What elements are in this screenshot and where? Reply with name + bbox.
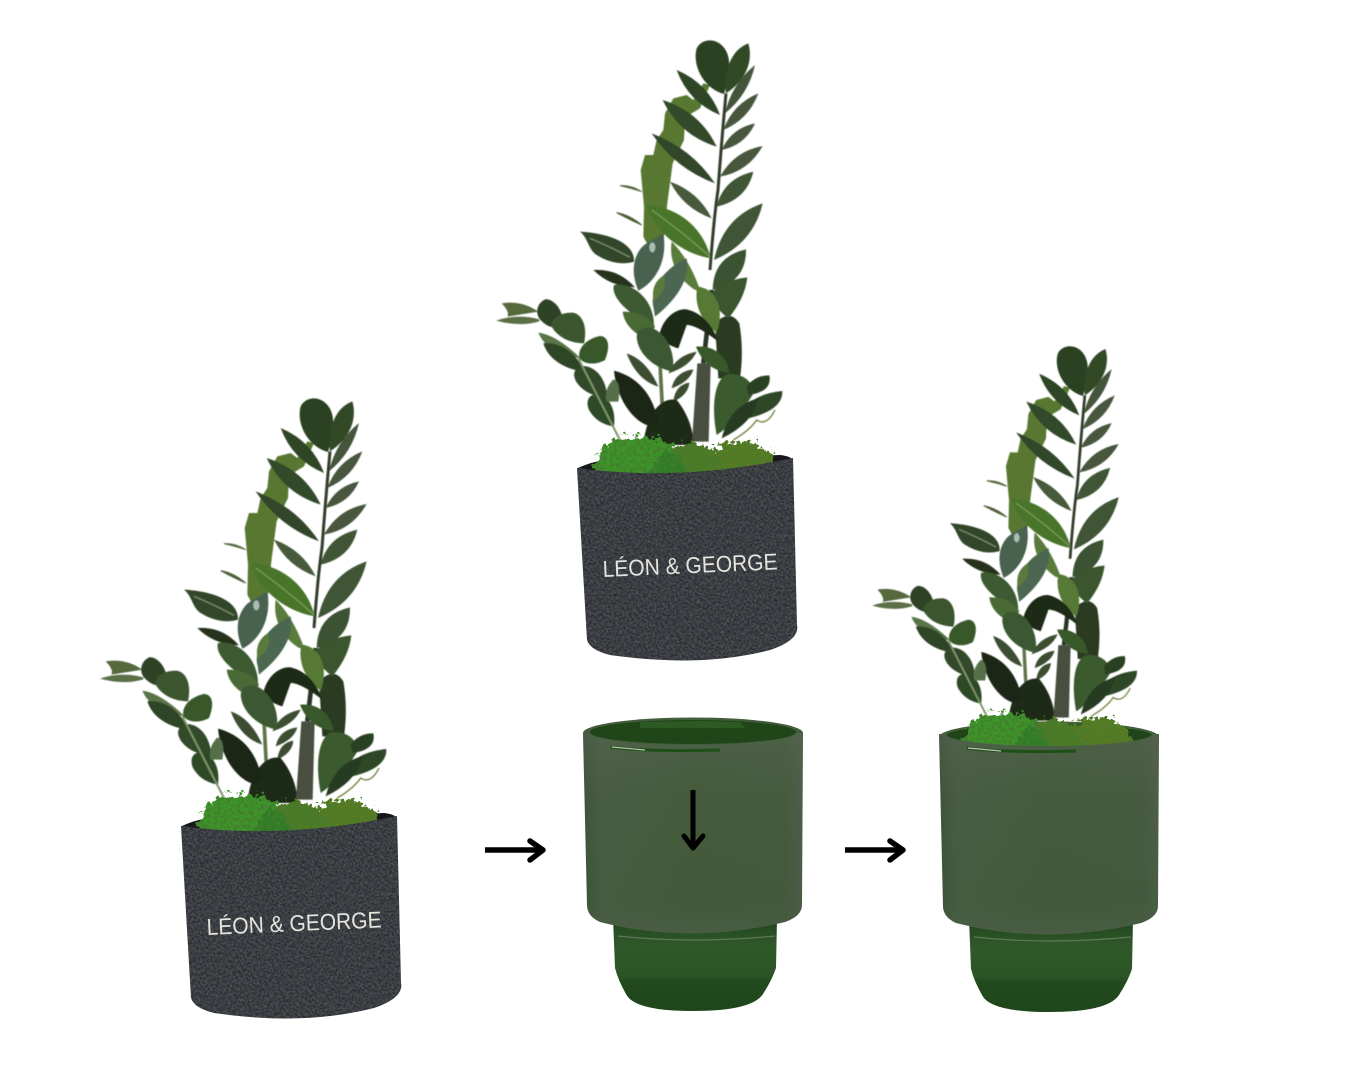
plant: left — [100, 398, 386, 838]
finished plant in green pot: right — [872, 346, 1159, 1012]
arrow: to the pot — [485, 841, 543, 860]
plant: centre — [496, 40, 782, 480]
plant lifted out in felt bag: centre — [496, 40, 797, 660]
potted plant in felt bag: left — [100, 398, 401, 1018]
felt bag: left — [181, 816, 401, 1018]
empty green ceramic pot: centre — [583, 718, 803, 1011]
plant: right — [872, 346, 1137, 753]
brand label: left: LÉON & GEORGE — [206, 906, 382, 940]
brand label: centre: LÉON & GEORGE — [602, 548, 778, 582]
arrow: down into the pot — [684, 790, 703, 848]
green pot: right — [939, 734, 1159, 1012]
felt bag: centre — [577, 458, 797, 660]
arrow: to the finished plant — [845, 841, 903, 860]
